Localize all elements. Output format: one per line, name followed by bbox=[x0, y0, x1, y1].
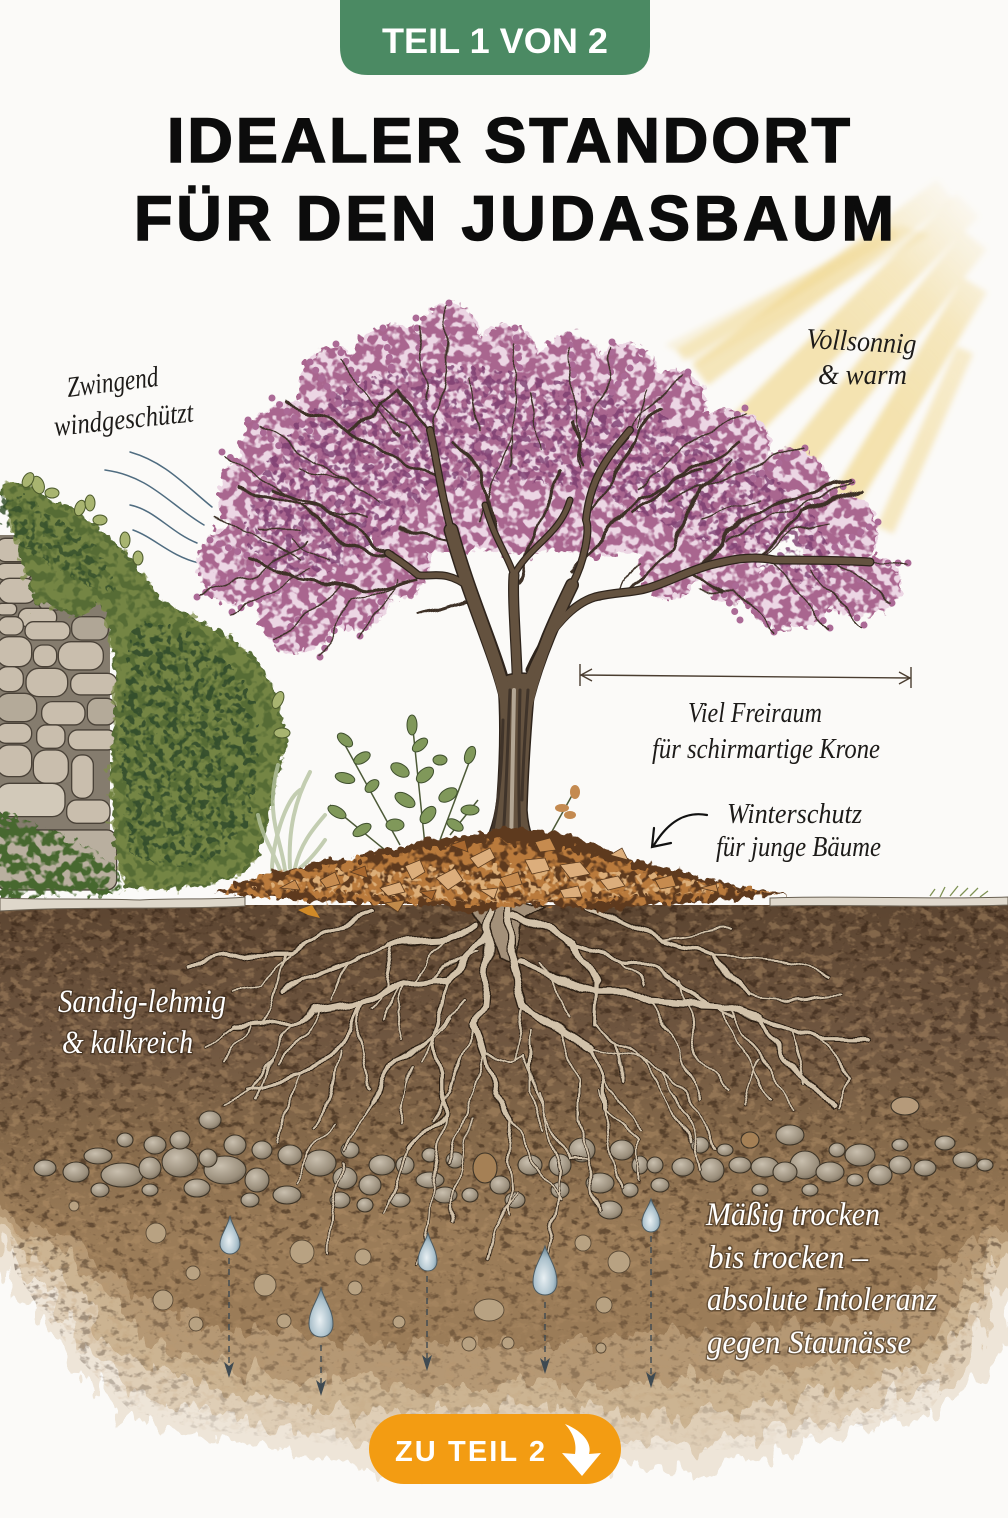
hedge dark foliage bbox=[0, 496, 258, 869]
label: free space: für schirmartige Krone bbox=[652, 733, 880, 765]
grass tuft bbox=[930, 886, 988, 897]
label: free space bbox=[652, 697, 880, 765]
header tab bbox=[340, 0, 650, 75]
label: soil type bbox=[58, 984, 226, 1061]
core wash bbox=[0, 1100, 1008, 1345]
label: winter protection: für junge Bäume bbox=[716, 831, 881, 863]
pebble layer bbox=[34, 1097, 993, 1353]
label: full sun: & warm bbox=[818, 359, 907, 391]
bark texture bbox=[490, 690, 528, 850]
button label: ZU TEIL 2 bbox=[395, 1436, 545, 1468]
label: moisture bbox=[705, 1197, 937, 1361]
label: winter protection: Winterschutz bbox=[727, 798, 862, 830]
hedge base bbox=[0, 483, 287, 889]
stone wall bbox=[0, 535, 117, 890]
root crown flare bbox=[466, 905, 542, 960]
label: moisture: absolute Intoleranz bbox=[707, 1282, 937, 1318]
label: full sun bbox=[806, 323, 917, 391]
label: soil type: Sandig-lehmig bbox=[58, 984, 226, 1020]
inner wash bbox=[0, 1100, 1008, 1385]
soil speckle bbox=[0, 905, 1008, 1450]
wind lines bbox=[105, 452, 212, 563]
seedling shrub bbox=[326, 715, 580, 850]
root outlines bbox=[193, 903, 872, 1265]
palest outer wash bbox=[0, 1100, 1008, 1480]
orange leaf fragment bbox=[298, 905, 320, 918]
curved arrow bbox=[652, 814, 707, 847]
main limbs outline bbox=[388, 430, 870, 700]
label: full sun: Vollsonnig bbox=[806, 323, 917, 361]
label: soil type: & kalkreich bbox=[62, 1025, 193, 1061]
water drops bbox=[220, 1199, 660, 1337]
ivy leaves on wall top bbox=[20, 471, 290, 738]
tree branches bbox=[200, 305, 908, 862]
medium branches bbox=[241, 390, 860, 615]
drainage arrows bbox=[224, 1236, 656, 1396]
label: moisture: Mäßig trocken bbox=[705, 1197, 880, 1233]
icon: down arrow bbox=[562, 1424, 601, 1476]
pale wash bbox=[0, 1100, 1008, 1450]
dimension arrow bbox=[580, 664, 911, 688]
soil cross-section bbox=[0, 905, 1008, 1480]
mulch mound bbox=[215, 828, 790, 918]
wall and hedge bbox=[0, 471, 325, 897]
label: wind protected: windgeschützt bbox=[52, 396, 196, 443]
trunk bbox=[474, 673, 548, 862]
label: moisture: bis trocken – bbox=[708, 1240, 868, 1276]
title bbox=[134, 106, 894, 254]
label: wind protected bbox=[52, 361, 196, 443]
tab label: TEIL 1 VON 2 bbox=[382, 22, 608, 61]
title: IDEALER STANDORT bbox=[167, 106, 850, 176]
solid top soil bbox=[0, 905, 1008, 1239]
crown shadow bbox=[248, 368, 832, 590]
tree crown bbox=[197, 303, 908, 657]
label: moisture: gegen Staunässe bbox=[707, 1325, 911, 1361]
twig tips with leaves bbox=[197, 303, 908, 657]
crown blossoms bbox=[198, 303, 902, 653]
pale grass bbox=[258, 765, 325, 870]
fine twigs bbox=[200, 305, 908, 655]
title: FÜR DEN JUDASBAUM bbox=[134, 184, 894, 254]
hedge light foliage bbox=[0, 483, 287, 889]
root light bbox=[193, 903, 872, 1265]
label: free space: Viel Freiraum bbox=[688, 697, 822, 729]
sun rays bbox=[665, 190, 975, 530]
mid wash bbox=[0, 1100, 1008, 1415]
root system bbox=[193, 903, 872, 1265]
ground plants at wall foot bbox=[0, 815, 121, 897]
main limbs light bbox=[388, 430, 870, 705]
next-part button bbox=[369, 1414, 621, 1484]
label: winter protection bbox=[716, 798, 881, 863]
label: wind protected: Zwingend bbox=[65, 361, 161, 404]
ground edge bbox=[0, 886, 1008, 911]
mulch leaves bbox=[280, 838, 718, 912]
crown pale wash bbox=[198, 303, 902, 653]
